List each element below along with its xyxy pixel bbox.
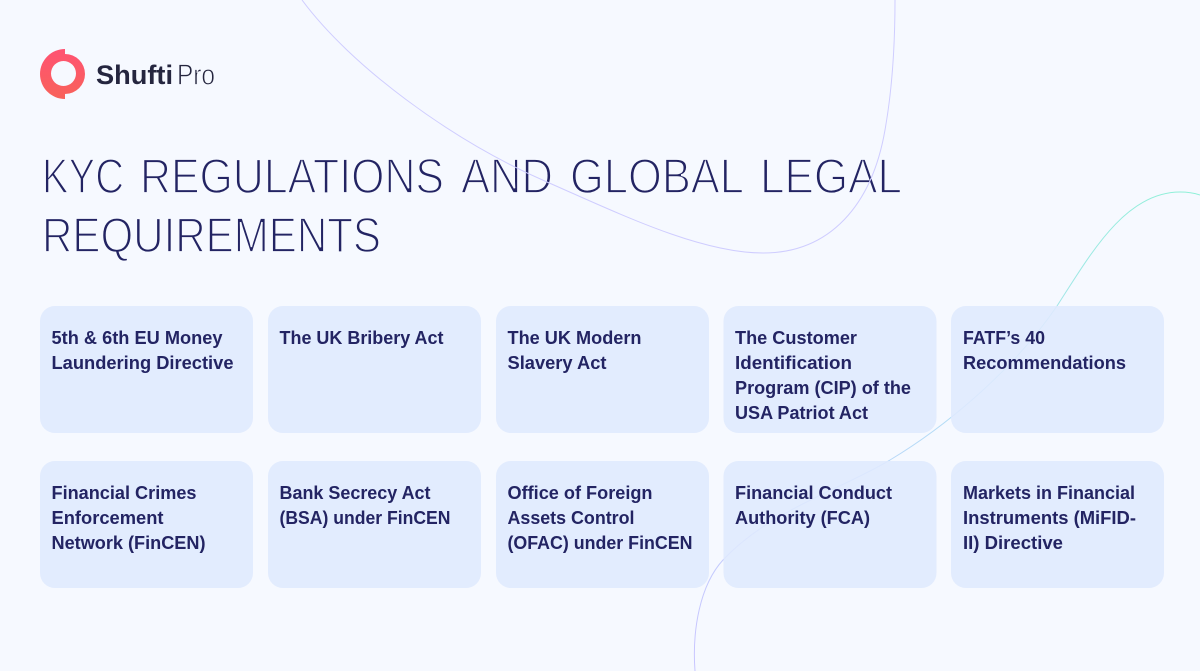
card: The UK Modern Slavery Act: The UK Modern <box>508 328 642 348</box>
title: KYC <box>42 150 124 204</box>
card: 5th & 6th EU Money Laundering Directive <box>40 306 253 433</box>
card: Financial Crimes Enforcement Network: Network (FinCEN) <box>52 533 206 553</box>
card: Markets in Financial Instruments: Instruments (MiFID- <box>963 508 1136 528</box>
card: Bank Secrecy Act: (BSA) under FinCEN <box>280 508 450 528</box>
card: Office of Foreign Assets Control <box>496 461 709 588</box>
card: 5th & 6th EU Money Laundering Directive: 5th & 6th EU Money <box>52 328 222 348</box>
card: The UK Bribery Act: The UK Bribery Act <box>280 328 444 348</box>
card: Markets in Financial Instruments <box>951 461 1164 588</box>
card: The Customer Identification Program: Identification <box>735 353 852 373</box>
title: GLOBAL <box>570 150 744 204</box>
card: The Customer Identification Program <box>724 306 936 433</box>
title <box>42 150 902 263</box>
card: Office of Foreign Assets Control: Office of Foreign <box>508 483 652 503</box>
card: Financial Crimes Enforcement Network: Enforcement <box>52 508 164 528</box>
logo: Shufti Pro <box>40 49 215 99</box>
card: Financial Crimes Enforcement Network: Financial Crimes <box>52 483 196 503</box>
icon: logo ring <box>40 49 85 99</box>
card: Bank Secrecy Act <box>268 461 481 588</box>
decorative curve: top purple <box>302 0 895 253</box>
title: AND <box>461 150 553 204</box>
card: Office of Foreign Assets Control: Assets Control <box>508 508 634 528</box>
card: FATF's 40 Recommendations: FATF’s 40 <box>963 328 1045 348</box>
card: Bank Secrecy Act: Bank Secrecy Act <box>280 483 431 503</box>
card: Office of Foreign Assets Control: (OFAC) under FinCEN <box>508 533 692 553</box>
card: The Customer Identification Program: Program (CIP) of the <box>735 378 911 398</box>
decorative curve: lower right gradient <box>694 192 1200 671</box>
card: Markets in Financial Instruments: II) Directive <box>963 533 1063 553</box>
card: The Customer Identification Program: The Customer <box>735 328 857 348</box>
card: FATF's 40 Recommendations <box>951 306 1164 433</box>
logo wordmark: Shufti <box>96 60 173 90</box>
card: Financial Conduct Authority: Financial Conduct <box>735 483 892 503</box>
card: Financial Conduct Authority <box>724 461 936 588</box>
card: Financial Crimes Enforcement Network <box>40 461 253 588</box>
card: The Customer Identification Program: USA Patriot Act <box>735 403 868 423</box>
card: The UK Modern Slavery Act <box>496 306 709 433</box>
card: Financial Conduct Authority: Authority (FCA) <box>735 508 870 528</box>
title: LEGAL <box>760 150 902 204</box>
card: 5th & 6th EU Money Laundering Directive: Laundering Directive <box>52 353 234 373</box>
card: FATF's 40 Recommendations: Recommendations <box>963 353 1126 373</box>
card: The UK Bribery Act <box>268 306 481 433</box>
title: REQUIREMENTS <box>42 209 381 263</box>
card: Markets in Financial Instruments: Markets in Financial <box>963 483 1135 503</box>
title: REGULATIONS <box>140 150 444 204</box>
card: The UK Modern Slavery Act: Slavery Act <box>508 353 606 373</box>
logo wordmark <box>96 60 215 92</box>
logo wordmark: Pro <box>177 60 215 92</box>
